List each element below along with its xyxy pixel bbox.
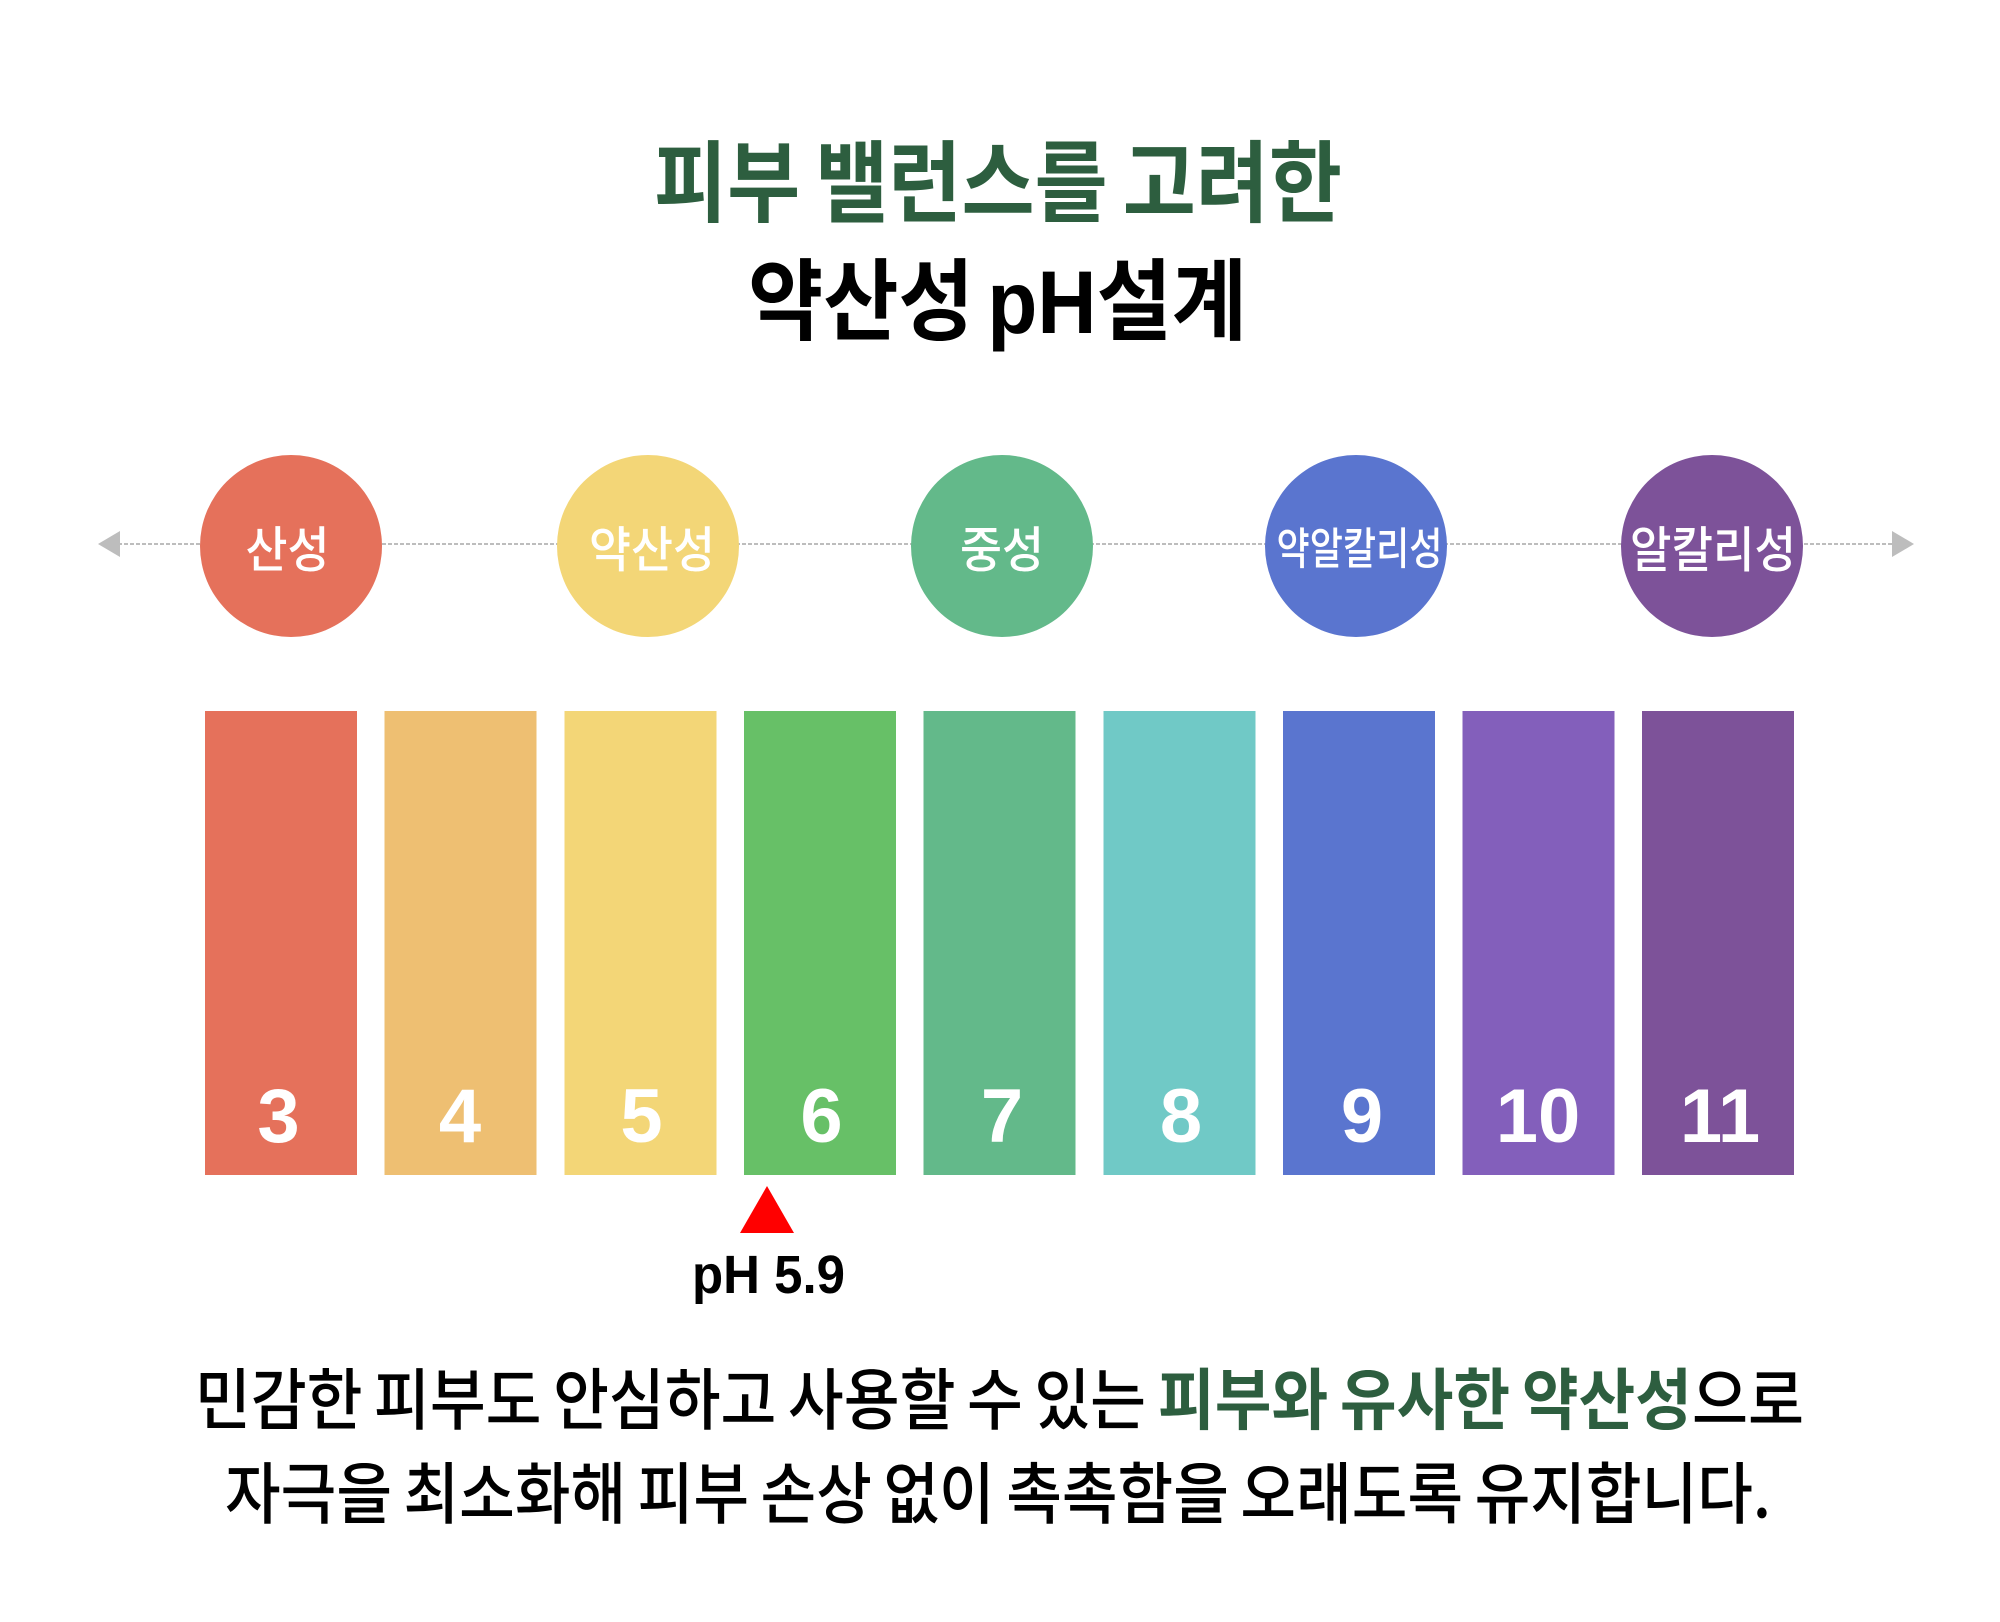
title line 2: 약산성 pH설계 — [748, 252, 1247, 352]
bar: pH 8: 8 — [1160, 1074, 1202, 1159]
icon: red marker triangle — [740, 1186, 794, 1233]
circle: acidic — [200, 455, 382, 637]
bar: pH 3: 3 — [257, 1074, 300, 1159]
icon: left arrow — [98, 531, 120, 557]
description text — [195, 1347, 1804, 1538]
icon: right arrow — [1892, 531, 1914, 557]
bar: pH 9 — [1283, 711, 1435, 1175]
pH 5.9 label: pH 5.9 — [692, 1245, 845, 1305]
bar: pH 4: 4 — [439, 1074, 481, 1159]
title — [654, 112, 1342, 352]
title line 1: 피부 밸런스를 고려한 — [654, 112, 1342, 241]
bar: pH 4 — [384, 711, 536, 1175]
bar: pH 9: 9 — [1341, 1074, 1383, 1159]
bar: pH 10 — [1462, 711, 1614, 1175]
circle: alkaline — [1621, 455, 1803, 637]
bar: pH 5 — [564, 711, 716, 1175]
pH bars — [205, 711, 1794, 1175]
circle: weak alkaline: 약알칼리성 — [1276, 513, 1442, 577]
description line 1 — [195, 1347, 1804, 1444]
bar: pH 8 — [1104, 711, 1256, 1175]
bar: pH 7 — [924, 711, 1076, 1175]
circle: neutral — [911, 455, 1093, 637]
bar: pH 11 — [1642, 711, 1794, 1175]
bar: pH 11: 11 — [1680, 1074, 1760, 1159]
circle: neutral: 중성 — [960, 511, 1044, 582]
circle: weak acidic: 약산성 — [589, 511, 715, 582]
bar: pH 10: 10 — [1496, 1074, 1580, 1159]
description line 1: 으로 — [1692, 1347, 1804, 1444]
circle: acidic: 산성 — [246, 511, 330, 582]
bar: pH 6: 6 — [800, 1074, 843, 1159]
circle: alkaline: 알칼리성 — [1630, 511, 1796, 582]
bar: pH 5: 5 — [620, 1074, 663, 1159]
bar: pH 7: 7 — [981, 1074, 1023, 1159]
circle: weak alkaline — [1265, 455, 1447, 637]
bar: pH 3 — [205, 711, 357, 1175]
category circles — [200, 455, 1803, 637]
pH scale axis — [98, 531, 1914, 557]
bar: pH 6 — [744, 711, 896, 1175]
description line 2: 자극을 최소화해 피부 손상 없이 촉촉함을 오래도록 유지합니다. — [225, 1441, 1771, 1538]
description line 1: 피부와 유사한 약산성 — [1158, 1347, 1692, 1444]
circle: weak acidic — [557, 455, 739, 637]
description line 1: 민감한 피부도 안심하고 사용할 수 있는 — [195, 1347, 1146, 1444]
